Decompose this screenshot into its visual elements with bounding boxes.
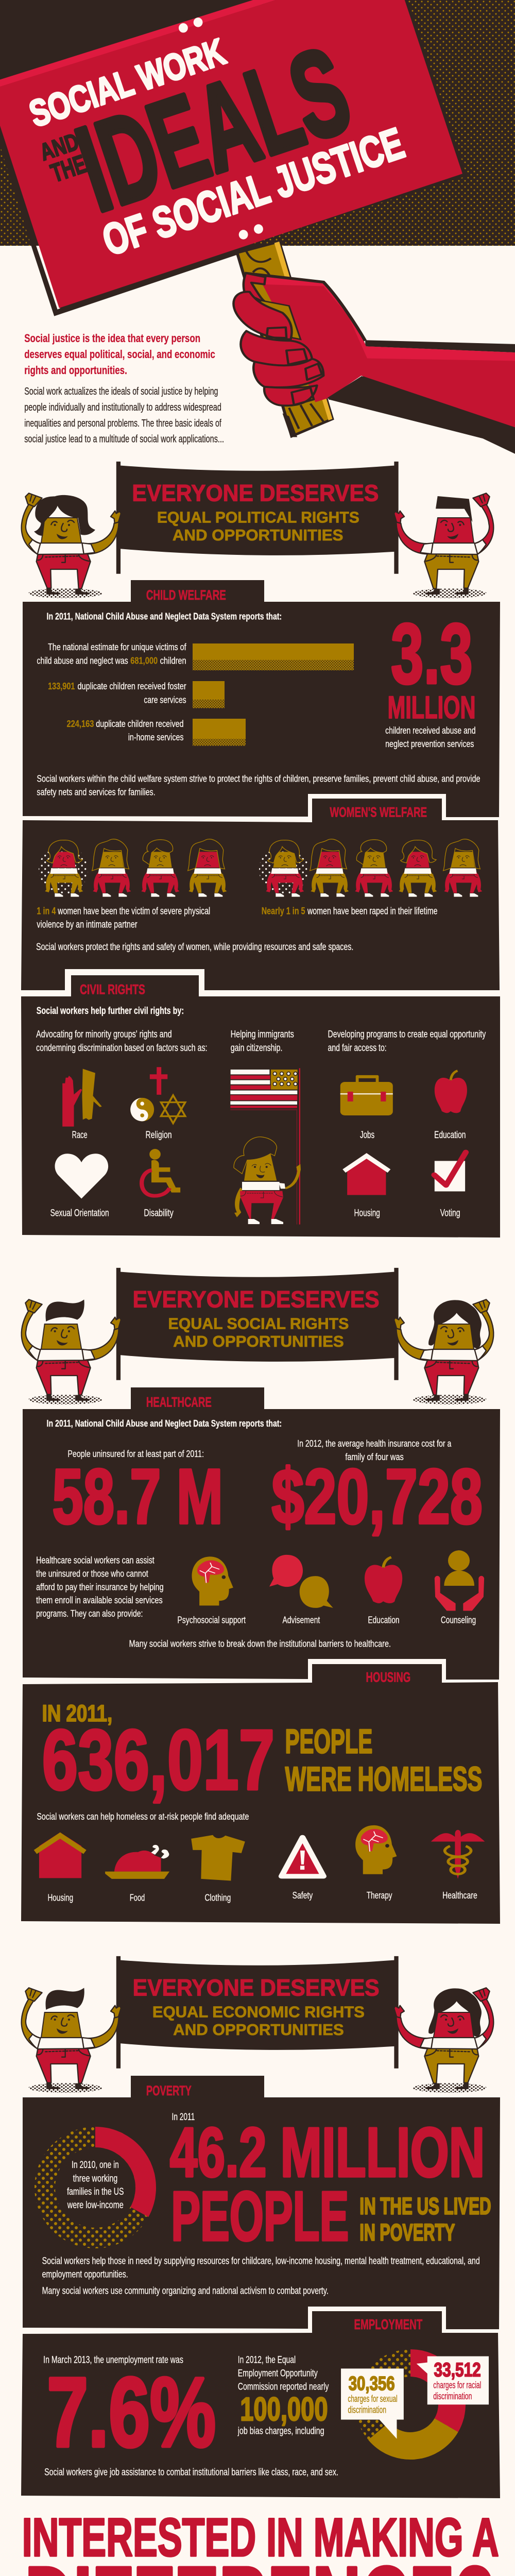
panel: healthcare: family of four was (345, 1451, 404, 1463)
callout: sexual discrimination: charges for sexual (348, 2394, 398, 2404)
header: protest sign held by a hand (0, 0, 515, 454)
icon: psychosocial support: Psychosocial support (177, 1615, 246, 1625)
icon: wheelchair: Disability (144, 1207, 174, 1218)
icon: food turkey (105, 1845, 169, 1903)
icon: therapy head (355, 1825, 397, 1901)
panel: child welfare: 681,000 (130, 655, 158, 666)
icon: fist holding the sign post (233, 273, 515, 454)
panel: women's welfare: Nearly 1 in 5 (262, 905, 305, 917)
icon: clothing shirt: Clothing (204, 1892, 231, 1903)
panel: housing (21, 1664, 500, 1924)
panel: civil rights: and fair access to: (328, 1042, 387, 1053)
panel: employment: job bias charges, including (237, 2426, 324, 2436)
title (25, 22, 410, 265)
panel: child welfare: children (160, 655, 186, 666)
icon: healthcare caduceus (431, 1830, 485, 1901)
figure: woman cheering right (394, 1988, 493, 2093)
panel: child welfare: 224,163 (66, 718, 94, 730)
panel: women's welfare: violence by an intimate partner (37, 919, 138, 930)
callout: sexual discrimination: 30,356 (349, 2373, 395, 2395)
icon: psychosocial support (177, 1556, 246, 1625)
panel: housing: Social workers can help homeless or at-risk people find adequate (37, 1811, 249, 1822)
icon: safety warning (282, 1837, 323, 1901)
panel: child welfare: safety nets and services for families. (37, 787, 156, 798)
panel: civil rights: Advocating for minority groups' rights and (36, 1028, 172, 1040)
figure: man cheering left (22, 1299, 121, 1404)
icon: safety warning: Safety (293, 1890, 313, 1901)
figure: man cheering left (22, 1988, 121, 2093)
title: SOCIAL WORK (25, 31, 230, 135)
panel: women's welfare: women have been raped in their lifetime (307, 905, 438, 917)
icon: religion (130, 1067, 185, 1140)
panel: housing: PEOPLE (285, 1722, 372, 1760)
icon: race: Race (72, 1129, 88, 1140)
title: OF SOCIAL JUSTICE (97, 118, 410, 265)
panel: employment: EMPLOYMENT (354, 2316, 422, 2332)
panel: healthcare: them enroll in available social services (36, 1595, 163, 1606)
illustration: girl with american flag (230, 1068, 301, 1225)
panel: women's welfare: women have been the victim of severe physical (58, 905, 210, 917)
callout: racial discrimination (417, 2357, 489, 2404)
banner: social rights (116, 1268, 399, 1380)
figures: one in five women (266, 839, 482, 897)
intro text block: rights and opportunities. (24, 364, 127, 377)
panel: women's welfare: WOMEN'S WELFARE (330, 805, 427, 820)
panel: women's welfare: 1 in 4 (37, 905, 56, 917)
panel: poverty: three working (73, 2173, 117, 2184)
panel: civil rights: condemning discrimination based on factors such as: (36, 1042, 207, 1053)
icon: housing (342, 1153, 390, 1218)
panel: poverty: POVERTY (146, 2083, 192, 2098)
panel: child welfare: duplicate children received foster (78, 681, 186, 692)
stat: 636,017: 636,017 (42, 1712, 274, 1807)
panel: child welfare: child abuse and neglect was (37, 655, 128, 666)
icon: counseling (435, 1550, 484, 1625)
panel: civil rights: Social workers help further civil rights by: (37, 1005, 184, 1016)
intro text block (24, 332, 224, 445)
panel: poverty (23, 2076, 500, 2329)
icon: voting (434, 1153, 466, 1218)
panel: poverty: employment opportunities. (42, 2268, 128, 2280)
panel: housing: HOUSING (366, 1670, 410, 1685)
panel: healthcare: People uninsured for at least part of 2011: (67, 1448, 204, 1459)
banner: economic rights: AND OPPORTUNITIES (173, 2021, 344, 2039)
icon: jobs briefcase (340, 1075, 393, 1140)
panel: civil rights: Helping immigrants (231, 1028, 294, 1040)
icon: healthcare caduceus: Healthcare (442, 1890, 477, 1901)
panel: poverty: In 2011 (172, 2111, 195, 2122)
intro text block: Social work actualizes the ideals of social justice by helping (24, 385, 218, 397)
panel: poverty: were low-income (67, 2199, 124, 2210)
stat: 46.2 million people (170, 2113, 485, 2255)
panel: civil rights (21, 975, 500, 1238)
icon: voting: Voting (440, 1207, 460, 1218)
panel: healthcare: afford to pay their insurance by helping (36, 1582, 164, 1592)
banner: social rights: EQUAL SOCIAL RIGHTS (168, 1315, 349, 1332)
callout: racial discrimination: 33,512 (434, 2359, 481, 2381)
panel: women's welfare (21, 799, 500, 990)
figures: one in four women (45, 839, 227, 897)
icon: therapy head: Therapy (367, 1890, 392, 1901)
panel: child welfare: In 2011, National Child Abuse and Neglect Data System reports that: (47, 612, 282, 622)
icon: education apple (365, 1557, 402, 1625)
panel: employment: In 2012, the Equal (238, 2354, 296, 2365)
icon: education apple: Education (434, 1129, 466, 1140)
intro text block: deserves equal political, social, and economic (24, 348, 215, 361)
icon: housing: Housing (47, 1892, 73, 1903)
panel: healthcare (23, 1387, 500, 1680)
banner: political rights: EQUAL POLITICAL RIGHTS (157, 509, 359, 526)
banner: economic rights: EQUAL ECONOMIC RIGHTS (152, 2004, 365, 2021)
panel: child welfare: The national estimate for unique victims of (48, 641, 186, 653)
panel: employment: Commission reported nearly (238, 2381, 329, 2392)
icon: counseling: Counseling (441, 1615, 476, 1625)
figure: woman cheering left (22, 493, 121, 598)
stat: 100,000: 100,000 (240, 2391, 328, 2428)
intro text block: Social justice is the idea that every person (24, 332, 200, 345)
call to action (22, 2507, 499, 2576)
intro text block: social justice lead to a multitude of social work applications... (24, 433, 224, 445)
panel: child welfare: CHILD WELFARE (146, 588, 226, 603)
panel: housing: IN 2011, (42, 1700, 112, 1726)
panel: poverty: families in the US (67, 2186, 124, 2197)
panel: civil rights: CIVIL RIGHTS (80, 982, 145, 997)
panel: child welfare: 133,901 (48, 681, 75, 692)
panel: healthcare: programs. They can also provide: (36, 1608, 143, 1619)
icon: food turkey: Food (130, 1892, 145, 1903)
panel: child welfare: duplicate children received (96, 718, 184, 730)
icon: housing (34, 1833, 87, 1903)
title: AND (37, 128, 82, 165)
icon: housing: Housing (354, 1207, 380, 1218)
banner: political rights: AND OPPORTUNITIES (173, 527, 344, 544)
panel: child welfare (23, 580, 500, 817)
intro text block: inequalities and personal problems. The three basic ideals of (24, 417, 221, 429)
icon: heart: Sexual Orientation (50, 1207, 109, 1218)
title: THE (47, 149, 90, 188)
banner: economic rights (116, 1956, 399, 2069)
panel: child welfare: care services (144, 694, 186, 705)
panel: healthcare: Healthcare social workers can assist (36, 1555, 154, 1566)
panel: healthcare: the uninsured or those who cannot (36, 1568, 148, 1579)
callout: racial discrimination: discrimination (433, 2391, 472, 2401)
icon: clothing shirt (191, 1835, 245, 1903)
panel: healthcare: HEALTHCARE (146, 1395, 212, 1410)
donut chart: one in three working families (45, 2137, 146, 2238)
banner: social rights: AND OPPORTUNITIES (173, 1333, 344, 1350)
icon: race (62, 1069, 102, 1140)
banner: political rights: EVERYONE DESERVES (132, 480, 379, 506)
donut chart: job bias charges (369, 2363, 452, 2446)
figure: man cheering right (394, 493, 493, 598)
callout: sexual discrimination: discrimination (348, 2404, 386, 2415)
figure: woman cheering right (394, 1299, 493, 1404)
icon: education apple: Education (368, 1615, 400, 1625)
banner: economic rights: EVERYONE DESERVES (133, 1974, 380, 2001)
icon: heart (50, 1154, 109, 1218)
panel: civil rights: gain citizenship. (231, 1042, 283, 1053)
icon: jobs briefcase: Jobs (360, 1129, 374, 1140)
banner: social rights: EVERYONE DESERVES (133, 1286, 380, 1312)
icon: wheelchair (142, 1149, 180, 1218)
banner: political rights (116, 462, 399, 574)
icon: religion: Religion (146, 1129, 172, 1140)
callout: sexual discrimination (341, 2368, 404, 2439)
panel: employment: Employment Opportunity (238, 2367, 318, 2379)
icon: advisement speech bubbles: Advisement (283, 1615, 320, 1625)
panel: child welfare: in-home services (128, 732, 184, 743)
stat: 58.7 M: 58.7 M (52, 1453, 223, 1540)
panel: employment (21, 2311, 500, 2498)
panel: healthcare: In 2011, National Child Abuse and Neglect Data System reports that: (47, 1418, 282, 1429)
panel: poverty: In 2010, one in (72, 2159, 119, 2170)
stat: 7.6%: 7.6% (47, 2357, 216, 2467)
icon: advisement speech bubbles (269, 1555, 333, 1625)
panel: employment: In March 2013, the unemployment rate was (43, 2354, 183, 2365)
icon: education apple (434, 1071, 467, 1140)
intro text block: people individually and institutionally to address widespread (24, 401, 221, 413)
